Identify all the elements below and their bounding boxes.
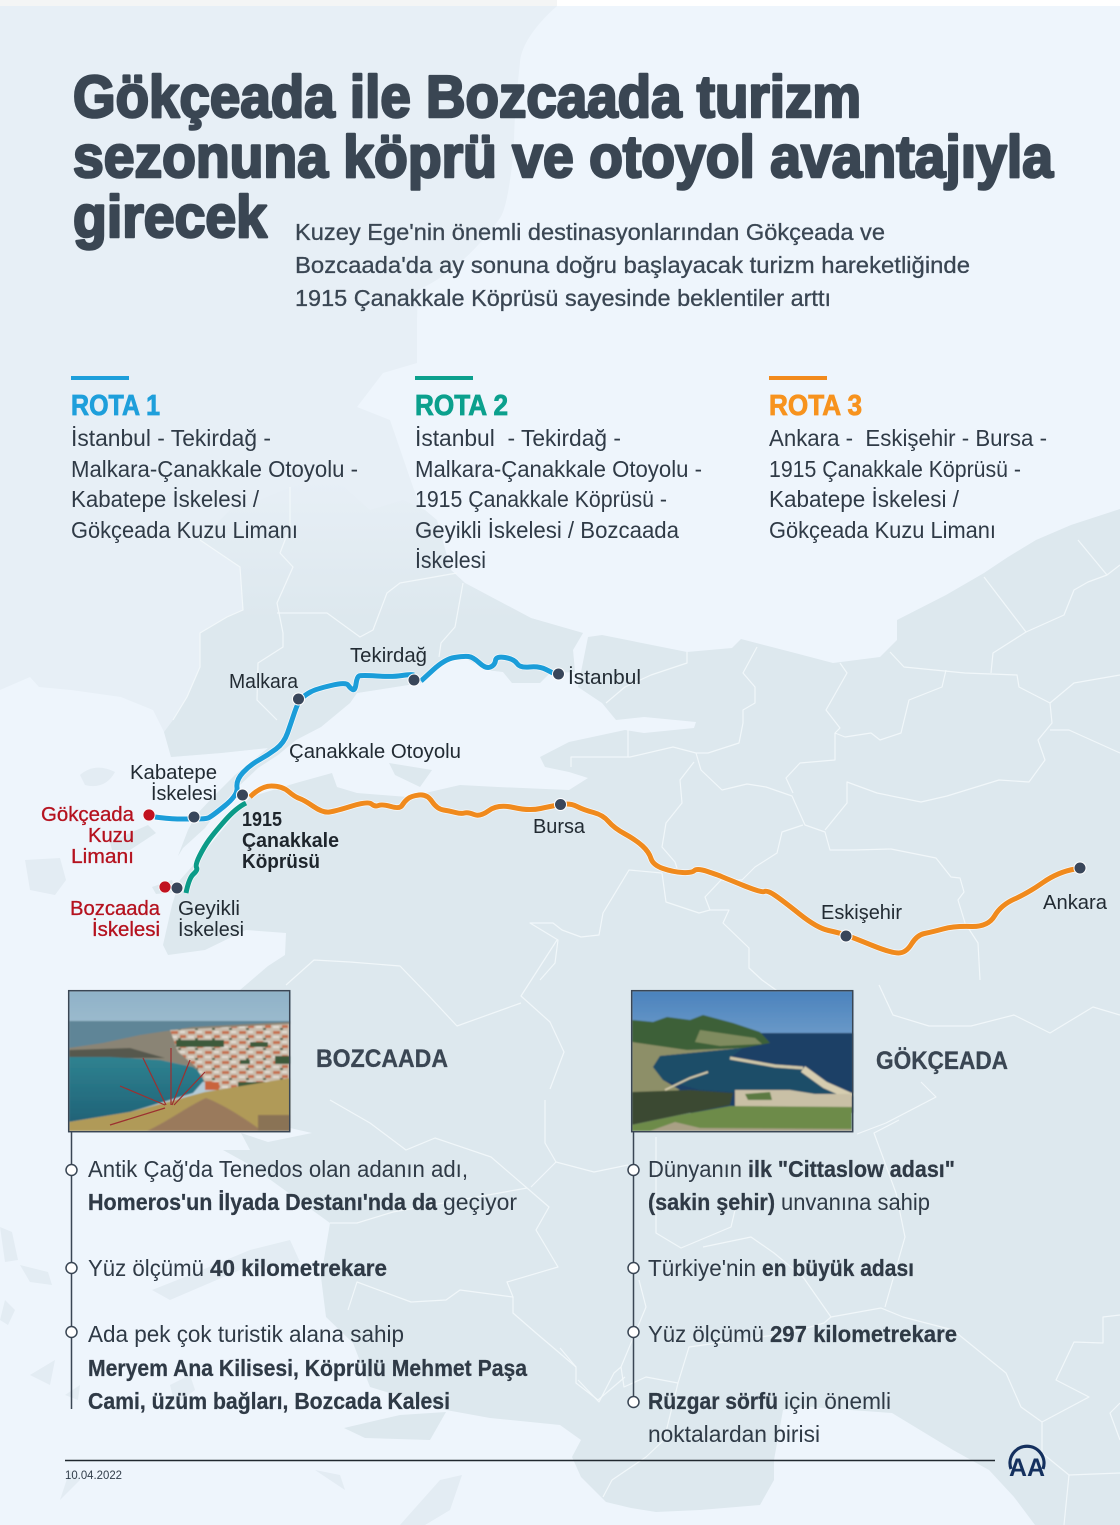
bridge label: 1915: [242, 809, 282, 831]
panel: Bozcaada facts: [66, 1132, 527, 1414]
route 1 description: Malkara-Çanakkale Otoyolu -: [71, 456, 358, 482]
date: 10.04.2022: [65, 1468, 122, 1482]
city labels: [130, 645, 1108, 941]
panel: Gökçeada facts: [628, 1132, 957, 1447]
fact 2: 40 kilometrekare: [210, 1255, 387, 1281]
fact 2: Yüz ölçümü: [88, 1255, 204, 1281]
panel: route 2: [415, 376, 702, 573]
city labels: Kabatepe: [130, 762, 217, 784]
bridge label: Çanakkale: [242, 830, 339, 852]
fact 3: 297 kilometrekare: [770, 1321, 957, 1347]
title: girecek: [73, 184, 267, 250]
fact 3: Meryem Ana Kilisesi, Köprülü Mehmet Paşa: [88, 1355, 527, 1381]
fact 4: noktalardan birisi: [648, 1421, 820, 1447]
city labels: İstanbul: [568, 666, 641, 689]
province borders: [173, 487, 1120, 1525]
fact 1: ilk "Cittaslow adası": [748, 1156, 955, 1182]
route 2 description: [415, 425, 702, 573]
fact 1: Dünyanın: [648, 1156, 742, 1182]
route 3 description: Gökçeada Kuzu Limanı: [769, 517, 996, 543]
city dots: [171, 668, 1086, 942]
city labels: İskelesi: [178, 918, 244, 941]
fact 3: Cami, üzüm bağları, Bozcada Kalesi: [88, 1388, 450, 1414]
fact 3: Yüz ölçümü: [648, 1321, 764, 1347]
fact 4: [648, 1388, 891, 1447]
route 2 description: 1915 Çanakkale Köprüsü -: [415, 486, 667, 512]
city labels: İskelesi: [151, 782, 217, 805]
route 2 description: Malkara-Çanakkale Otoyolu -: [415, 456, 702, 482]
city labels: Eskişehir: [821, 902, 902, 924]
subtitle: 1915 Çanakkale Köprüsü sayesinde beklentiler arttı: [295, 285, 831, 311]
fact 1: (sakin şehir): [648, 1189, 775, 1215]
island port labels: [41, 804, 161, 941]
panel: route 1: [71, 376, 358, 543]
fact 4: Rüzgar sörfü: [648, 1388, 778, 1414]
island port labels: Limanı: [71, 846, 134, 868]
subtitle: Kuzey Ege'nin önemli destinasyonlarından Gökçeada ve: [295, 219, 885, 245]
island port labels: Gökçeada: [41, 804, 135, 826]
timeline line: [70, 1132, 72, 1409]
city labels: Ankara: [1043, 892, 1108, 914]
subtitle: [295, 219, 970, 311]
fact 3: Ada pek çok turistik alana sahip: [88, 1321, 404, 1347]
fact 1: Homeros'un İlyada Destanı'nda da: [88, 1189, 437, 1215]
bridge label: [242, 809, 339, 873]
route map: [41, 645, 1108, 953]
photo: Gökçeada: [632, 991, 853, 1132]
timeline markers: [66, 1164, 77, 1338]
island port labels: Kuzu: [88, 825, 134, 847]
title: Gökçeada ile Bozcaada turizm: [73, 64, 861, 130]
route 2 description: İstanbul - Tekirdağ -: [415, 425, 621, 451]
bridge label: Köprüsü: [242, 851, 320, 873]
route 1 description: İstanbul - Tekirdağ -: [71, 425, 271, 451]
route 3 description: [769, 425, 1047, 543]
fact 1: unvanına sahip: [781, 1189, 930, 1215]
route 1 description: Kabatepe İskelesi /: [71, 486, 260, 512]
city labels: Bursa: [533, 816, 586, 838]
city labels: Tekirdağ: [350, 645, 427, 667]
route 3 description: 1915 Çanakkale Köprüsü -: [769, 456, 1021, 482]
islands: [0, 763, 462, 1525]
fact 4: için önemli: [784, 1388, 891, 1414]
heading: Gökçeada: GÖKÇEADA: [876, 1046, 1008, 1075]
fact 2: [648, 1255, 914, 1281]
icon: AA agency logo: AA: [1009, 1454, 1045, 1482]
fact 2: [88, 1255, 387, 1281]
route 2 description: İskelesi: [415, 547, 486, 573]
route 1 colour bar: [71, 376, 129, 380]
route 1 heading: ROTA 1: [71, 390, 160, 422]
island port dots: [143, 809, 171, 893]
heading: Bozcaada: BOZCAADA: [316, 1045, 448, 1073]
city labels: Malkara: [229, 671, 299, 693]
top white strip: [557, 0, 1120, 6]
subtitle: Bozcaada'da ay sonuna doğru başlayacak turizm hareketliğinde: [295, 252, 970, 278]
fact 3: [88, 1321, 527, 1414]
top left pale strip: [0, 0, 557, 6]
fact 1: [648, 1156, 955, 1215]
route 3 description: Ankara - Eskişehir - Bursa -: [769, 425, 1047, 451]
footer rule: [65, 1460, 995, 1462]
island port labels: İskelesi: [92, 918, 160, 941]
route 2 heading: ROTA 2: [415, 390, 508, 422]
route 2 description: Geyikli İskelesi / Bozcaada: [415, 517, 679, 543]
timeline markers: [628, 1164, 639, 1408]
title: [73, 64, 1054, 250]
route 2 colour bar: [415, 376, 473, 380]
title: sezonuna köprü ve otoyol avantajıyla: [73, 124, 1054, 190]
fact 1: [88, 1156, 517, 1215]
teal route line: [186, 803, 246, 893]
orange route line: [250, 786, 1075, 953]
fact 1: Antik Çağ'da Tenedos olan adanın adı,: [88, 1156, 468, 1182]
photo: Bozcaada: [69, 991, 290, 1132]
route 3 heading: ROTA 3: [769, 390, 862, 422]
fact 2: Türkiye'nin: [648, 1255, 756, 1281]
fact 3: [648, 1321, 957, 1347]
route 3 colour bar: [769, 376, 827, 380]
fact 1: geçiyor: [443, 1189, 517, 1215]
island port labels: Bozcaada: [70, 898, 161, 920]
panel: route 3: [769, 376, 1047, 543]
route 1 description: Gökçeada Kuzu Limanı: [71, 517, 298, 543]
fact 2: en büyük adası: [762, 1255, 914, 1281]
blue route line: [155, 656, 553, 819]
city labels: Çanakkale Otoyolu: [289, 741, 461, 763]
route 3 description: Kabatepe İskelesi /: [769, 486, 960, 512]
timeline line: [632, 1132, 634, 1402]
city labels: Geyikli: [178, 898, 240, 920]
route 1 description: [71, 425, 358, 543]
